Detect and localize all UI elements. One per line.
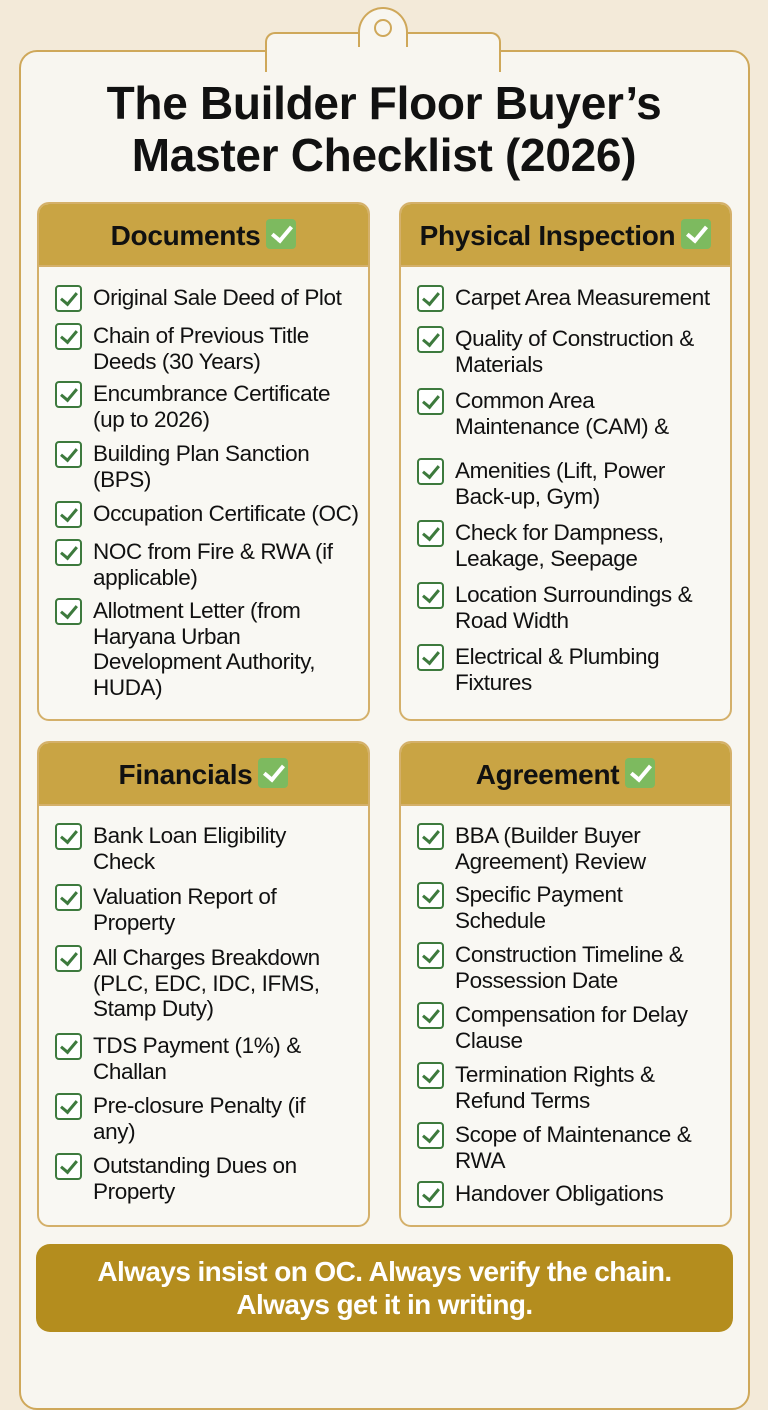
- panel: physical inspection: Road Width: [455, 608, 569, 632]
- panel: documents: Original Sale Deed of Plot: [93, 285, 342, 310]
- panel: agreement: Compensation for Delay: [455, 1002, 688, 1027]
- panel: financials: Challan: [93, 1058, 167, 1084]
- heading: financials: [39, 743, 368, 806]
- panel: agreement: Refund Terms: [455, 1088, 590, 1112]
- panel: physical inspection: Back-up, Gym): [455, 484, 600, 508]
- panel: financials: Property: [93, 1178, 175, 1204]
- panel: agreement: Termination Rights &: [455, 1062, 655, 1087]
- heading: documents: [39, 204, 368, 267]
- panel: financials: (PLC, EDC, IDC, IFMS,: [93, 970, 320, 996]
- panel: financials: any): [93, 1118, 135, 1144]
- panel: physical inspection: Electrical & Plumbing: [455, 644, 659, 669]
- panel: documents: Occupation Certificate (OC): [93, 501, 359, 526]
- banner: key takeaway: [36, 1244, 733, 1332]
- panel: financials: Outstanding Dues on: [93, 1153, 297, 1178]
- panel: documents: Haryana Urban: [93, 624, 240, 648]
- panel: physical inspection: Quality of Construction &: [455, 326, 694, 351]
- panel: physical inspection: Carpet Area Measurement: [455, 285, 710, 310]
- panel: physical inspection: Location Surroundings &: [455, 582, 692, 607]
- panel: financials: Stamp Duty): [93, 996, 214, 1021]
- panel: physical inspection: Amenities (Lift, Power: [455, 458, 665, 483]
- panel: documents: Allotment Letter (from: [93, 598, 301, 623]
- panel: physical inspection: Fixtures: [455, 670, 532, 694]
- panel: agreement: Scope of Maintenance &: [455, 1122, 691, 1147]
- heading: physical inspection: Physical Inspection: [420, 220, 675, 251]
- panel: documents: NOC from Fire & RWA (if: [93, 539, 333, 564]
- panel: documents: [37, 202, 370, 721]
- panel: agreement: Handover Obligations: [455, 1181, 663, 1206]
- panel: physical inspection: Check for Dampness,: [455, 520, 664, 545]
- panel: physical inspection: Common Area: [455, 388, 594, 413]
- heading: documents: Documents: [111, 220, 260, 251]
- panel: physical inspection: Leakage, Seepage: [455, 546, 638, 570]
- panel: documents: (up to 2026): [93, 406, 210, 432]
- panel: financials: Valuation Report of: [93, 884, 276, 909]
- heading: agreement: Agreement: [476, 759, 619, 790]
- panel: physical inspection: Maintenance (CAM) &: [455, 414, 669, 438]
- panel: financials: Property: [93, 910, 175, 934]
- panel: documents: Encumbrance Certificate: [93, 381, 330, 406]
- panel: agreement: Agreement) Review: [455, 848, 646, 874]
- panel: documents: applicable): [93, 564, 197, 590]
- panel: documents: Building Plan Sanction: [93, 441, 309, 466]
- title: The Builder Floor Buyer’s: [107, 77, 661, 129]
- panel: documents: (BPS): [93, 466, 151, 492]
- panel: documents: Deeds (30 Years): [93, 348, 260, 374]
- panel: financials: All Charges Breakdown: [93, 945, 320, 970]
- heading: agreement: [401, 743, 730, 806]
- panel: financials: Pre-closure Penalty (if: [93, 1093, 305, 1118]
- panel: agreement: [399, 741, 732, 1227]
- title: Master Checklist (2026): [132, 129, 636, 181]
- panel: agreement: Construction Timeline &: [455, 942, 683, 967]
- panel: physical inspection: [399, 202, 732, 721]
- panel: financials: [37, 741, 370, 1227]
- panel: agreement: Possession Date: [455, 968, 618, 992]
- panel: physical inspection: Materials: [455, 352, 543, 376]
- panel: agreement: Schedule: [455, 908, 546, 932]
- panel: documents: Chain of Previous Title: [93, 323, 309, 348]
- panel: financials: TDS Payment (1%) &: [93, 1033, 301, 1058]
- banner: key takeaway: Always insist on OC. Always verify the chain.: [97, 1256, 672, 1287]
- panel: agreement: BBA (Builder Buyer: [455, 823, 640, 848]
- panel: financials: Bank Loan Eligibility: [93, 823, 286, 848]
- panel: agreement: RWA: [455, 1148, 505, 1172]
- heading: physical inspection: [401, 204, 730, 267]
- panel: agreement: Specific Payment: [455, 882, 622, 907]
- heading: financials: Financials: [119, 759, 252, 790]
- panel: agreement: Clause: [455, 1028, 523, 1052]
- title: [107, 77, 661, 181]
- panel: documents: HUDA): [93, 674, 162, 700]
- clipboard clip: [265, 7, 501, 72]
- panel: financials: Check: [93, 848, 155, 874]
- banner: key takeaway: Always get it in writing.: [236, 1289, 533, 1320]
- panel: documents: Development Authority,: [93, 649, 315, 674]
